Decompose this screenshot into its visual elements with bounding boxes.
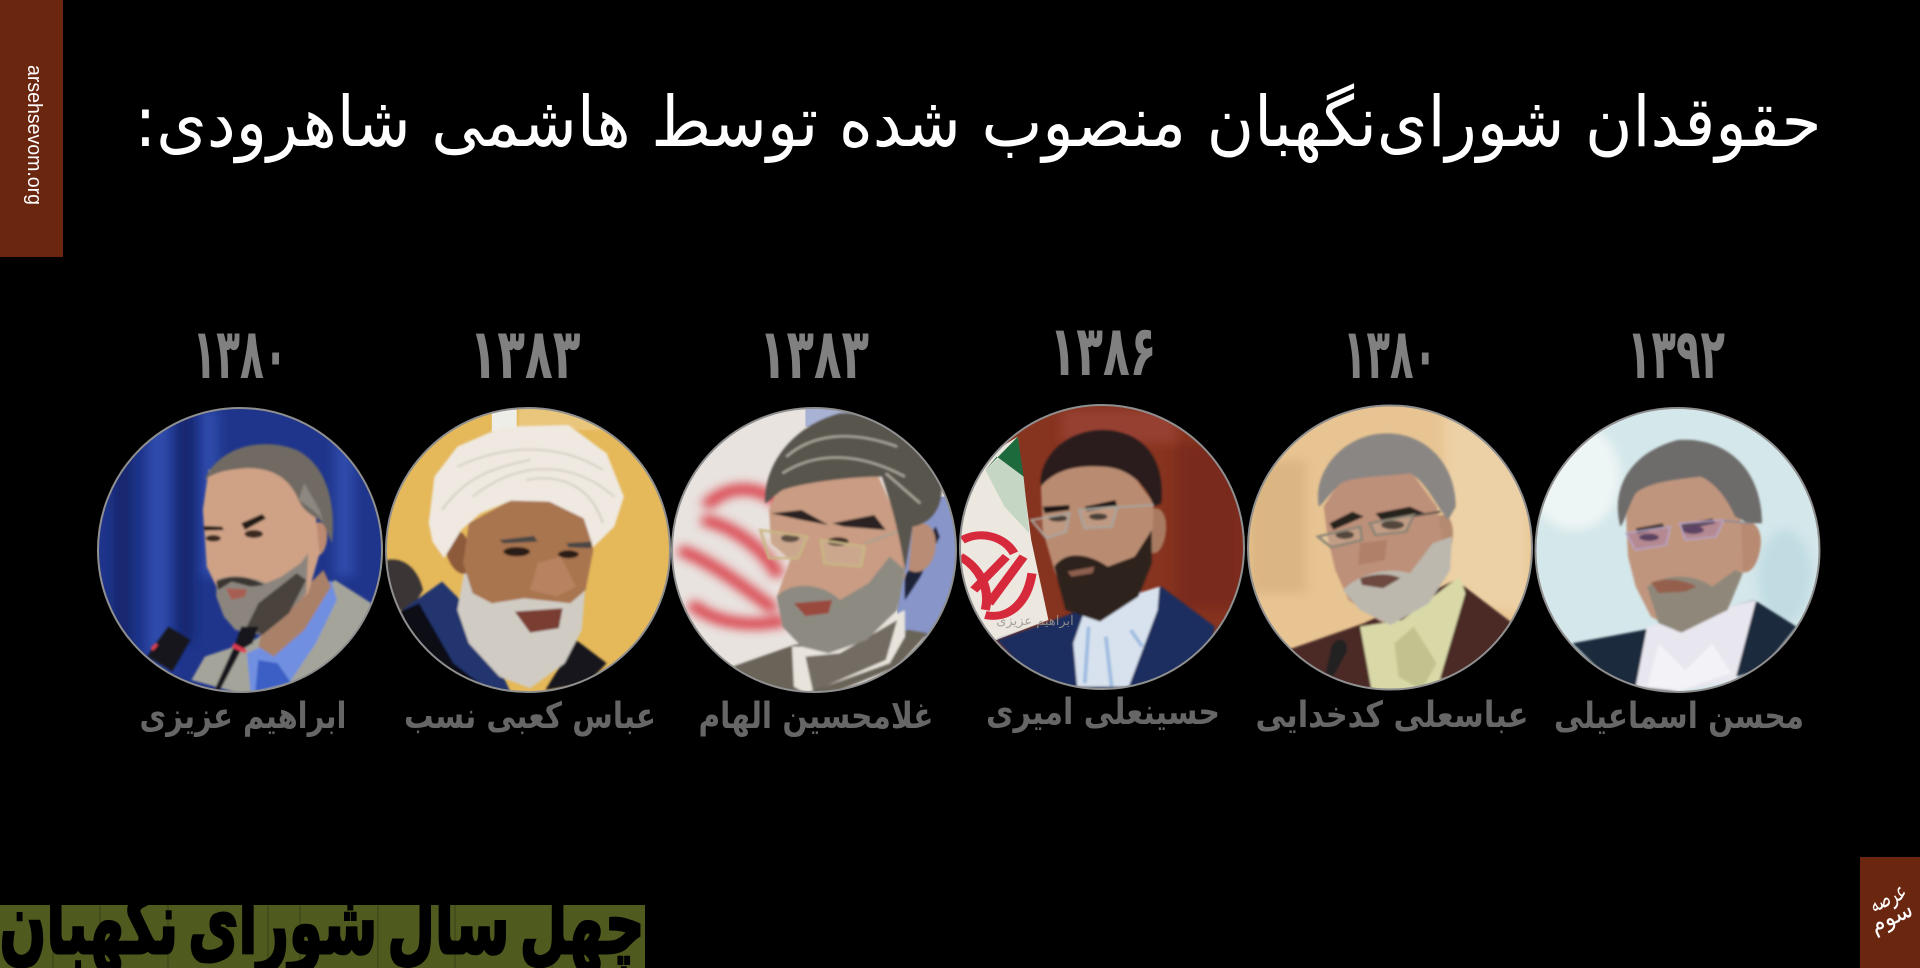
- logo: arsehsevom: سوم: [1865, 895, 1917, 939]
- site tab: arsehsevom.org: arsehsevom.org: [23, 65, 45, 205]
- name: ابراهیم عزیزی: [140, 696, 346, 737]
- name: حسینعلی امیری: [986, 692, 1220, 733]
- portrait: Abbas Kabi Nasab: [381, 403, 679, 703]
- year 1383: ۱۳۸۳: [470, 313, 580, 395]
- title: حقوقدان شورای‌نگهبان منصوب شده توسط هاشمی شاهرودی:: [134, 81, 1822, 164]
- column: غلامحسین الهام: [671, 334, 957, 737]
- year 1386: ۱۳۸۶: [1050, 310, 1156, 392]
- year 1392: ۱۳۹۲: [1627, 313, 1725, 395]
- year 1380: ۱۳۸۰: [192, 313, 288, 395]
- column: ابراهیم عزیزی: [97, 334, 383, 737]
- column: محسن اسماعیلی: [1529, 313, 1827, 737]
- name: غلامحسین الهام: [698, 696, 934, 737]
- column: عباس کعبی نسب: [381, 313, 679, 737]
- name: محسن اسماعیلی: [1554, 696, 1804, 737]
- portrait: Gholamhossein Elham: [671, 407, 957, 693]
- name: عباسعلی کدخدایی: [1256, 695, 1528, 736]
- logo: arsehsevom: [1857, 857, 1920, 968]
- portrait: Hosseinali Amiri: [955, 400, 1253, 700]
- series banner: [0, 874, 645, 968]
- site tab: arsehsevom.org: [0, 0, 63, 257]
- year 1383: ۱۳۸۳: [759, 313, 869, 395]
- year 1380: ۱۳۸۰: [1343, 313, 1437, 395]
- name: عباس کعبی نسب: [404, 696, 656, 737]
- column: عباسعلی کدخدایی: [1241, 313, 1540, 736]
- watermark: ابراهیم عزیزی: [996, 614, 1074, 629]
- portrait: Abbasali Kadkhodaei: [1241, 400, 1540, 700]
- portrait: Mohsen Esmaeili: [1529, 403, 1827, 697]
- column: حسینعلی امیری: [955, 310, 1253, 733]
- portrait: Ebrahim Azizi: [97, 407, 383, 693]
